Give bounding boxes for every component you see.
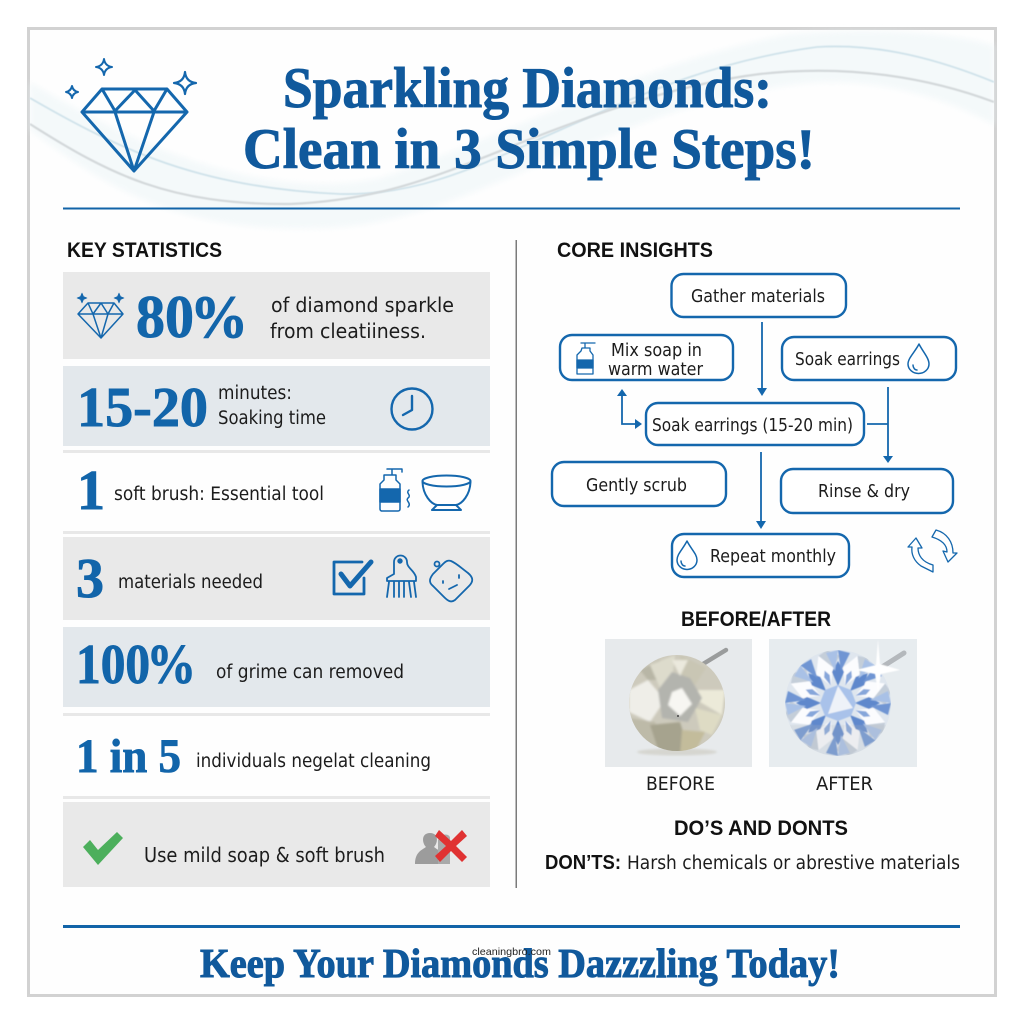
panel: materials needed bbox=[63, 537, 490, 620]
arrow: side soak to rinse bbox=[867, 387, 893, 463]
heading: key statistics: KEY STATISTICS bbox=[67, 239, 222, 262]
icon: header diamond bbox=[66, 59, 196, 171]
step: repeat monthly bbox=[672, 534, 849, 577]
title bbox=[243, 57, 815, 181]
icon: small diamond bbox=[77, 293, 124, 338]
arrow: soak to repeat bbox=[756, 452, 766, 529]
step: gather materials bbox=[672, 274, 846, 317]
step: soak timed: Soak earrings (15-20 min) bbox=[652, 416, 853, 436]
heading: before/after: BEFORE/AFTER bbox=[681, 608, 831, 631]
text: mix soap label: warm water bbox=[608, 360, 704, 380]
step: gently scrub: Gently scrub bbox=[586, 476, 687, 496]
stat: 80%: 80% bbox=[136, 284, 248, 350]
text: sparkle description: from cleatiiness. bbox=[270, 319, 426, 343]
footer call to action: Keep Your Diamonds Dazzzling Today! bbox=[200, 940, 840, 986]
icon: sponge bbox=[430, 561, 472, 601]
text: sparkle description: of diamond sparkle bbox=[271, 293, 454, 317]
text: don'ts: Harsh chemicals or abrestive materials bbox=[627, 853, 960, 874]
text: neglect description: individuals negelat cleaning bbox=[196, 751, 431, 772]
watermark: cleaningbro.com bbox=[472, 946, 551, 958]
title: Sparkling Diamonds: bbox=[283, 57, 772, 120]
text: brush description: soft brush: Essential tool bbox=[114, 484, 324, 505]
icon: soap bottle bbox=[380, 469, 409, 511]
arrow: gather to soak bbox=[757, 322, 767, 396]
text: soaking description bbox=[218, 383, 326, 429]
panel: 1 in 5 bbox=[76, 730, 431, 783]
flowchart bbox=[552, 274, 957, 577]
step: rinse and dry: Rinse & dry bbox=[818, 482, 910, 502]
text: mix soap label: Mix soap in bbox=[611, 341, 702, 361]
heading: do's and donts: DO’S AND DONTS bbox=[674, 817, 848, 840]
step: mix soap bbox=[560, 335, 733, 380]
step: soak earrings: Soak earrings bbox=[795, 350, 900, 370]
icon: water drop bbox=[908, 344, 929, 374]
label: before: BEFORE bbox=[646, 774, 715, 795]
panel: 80% sparkle bbox=[63, 272, 490, 359]
label: after: AFTER bbox=[816, 774, 873, 795]
text: materials description: materials needed bbox=[118, 572, 263, 593]
step: repeat monthly: Repeat monthly bbox=[710, 547, 836, 567]
heading: core insights: CORE INSIGHTS bbox=[557, 239, 713, 262]
panel: grime removed bbox=[63, 627, 490, 707]
icon: water drop small bbox=[677, 541, 697, 570]
icon: sparkle star bbox=[856, 640, 900, 692]
icon: clock bbox=[392, 388, 432, 430]
icon: bowl bbox=[422, 476, 470, 510]
image: dirty diamond bbox=[605, 639, 752, 767]
step: soak timed bbox=[646, 403, 864, 445]
icon: repeat arrows bbox=[908, 530, 957, 572]
stat: 1: 1 bbox=[77, 460, 105, 522]
icon: brush bbox=[387, 556, 416, 597]
text: sparkle description bbox=[270, 293, 454, 343]
image: clean diamond bbox=[769, 639, 917, 767]
title: Clean in 3 Simple Steps! bbox=[243, 118, 815, 181]
step: gather materials: Gather materials bbox=[691, 287, 825, 307]
panel: use mild soap bbox=[63, 802, 490, 887]
text: don'ts: DON’TS: bbox=[545, 852, 621, 874]
arrow: mix to soak loop bbox=[617, 389, 642, 429]
icon: crossed person bbox=[415, 830, 467, 864]
panel: soaking time bbox=[63, 366, 490, 446]
step: rinse and dry bbox=[781, 469, 953, 513]
icon: green check bbox=[83, 832, 123, 865]
step: gently scrub bbox=[552, 462, 726, 506]
step: soak earrings bbox=[782, 337, 956, 380]
text: grime description: of grime can removed bbox=[216, 662, 404, 683]
text: mild soap tip: Use mild soap & soft brush bbox=[144, 843, 385, 867]
panel: soft brush bbox=[77, 460, 470, 522]
icon: checkbox bbox=[334, 562, 371, 594]
stat: 1 in 5: 1 in 5 bbox=[76, 730, 181, 783]
stat: 15-20: 15-20 bbox=[77, 377, 208, 439]
stat: 100%: 100% bbox=[76, 634, 196, 696]
text: soaking description: minutes: bbox=[218, 383, 292, 404]
background swoosh bbox=[30, 31, 994, 229]
icon: small bottle bbox=[577, 343, 595, 374]
text: soaking description: Soaking time bbox=[218, 408, 326, 429]
stat: 3: 3 bbox=[76, 548, 104, 610]
text: mix soap label bbox=[608, 341, 704, 380]
